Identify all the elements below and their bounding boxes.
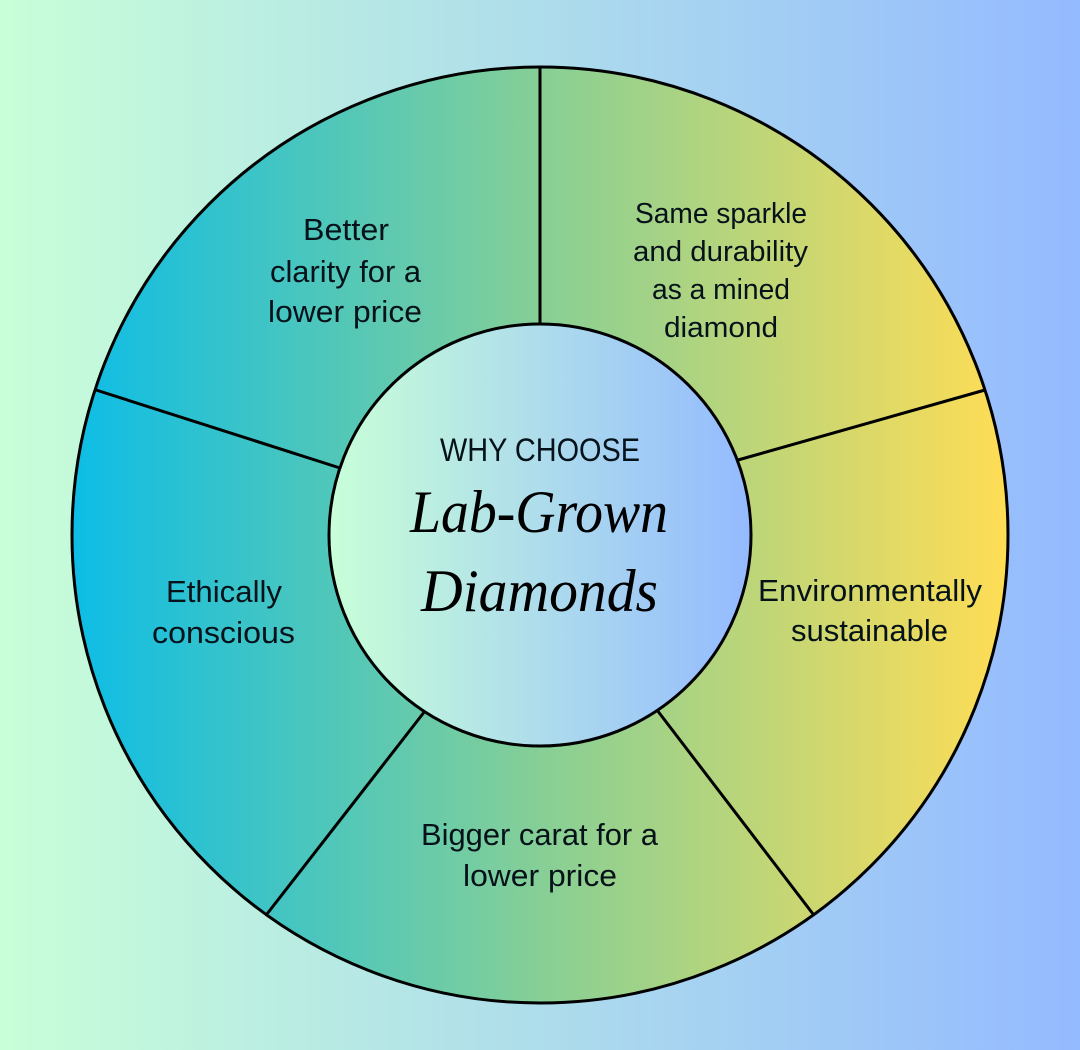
segment: better clarity: Better [303, 212, 389, 247]
segment: same sparkle [633, 198, 809, 344]
center hub [329, 324, 751, 746]
center title: WHY CHOOSE [440, 432, 640, 468]
segment: same sparkle: as a mined [652, 274, 790, 306]
center title: Lab-Grown [409, 479, 668, 545]
segment: bigger carat [421, 817, 659, 893]
segment: ethically conscious [152, 574, 295, 650]
center title: Diamonds [420, 558, 658, 624]
segment: same sparkle: and durability [633, 236, 809, 268]
segment: better clarity: clarity for a [270, 254, 422, 289]
wheel [72, 67, 1008, 1003]
segment: same sparkle: diamond [664, 312, 778, 344]
segment: ethically conscious: conscious [152, 615, 295, 650]
segment: bigger carat: lower price [463, 858, 617, 893]
segment: bigger carat: Bigger carat for a [421, 817, 659, 852]
center title [409, 432, 668, 624]
segment: same sparkle: Same sparkle [635, 198, 807, 230]
segment: better clarity [268, 212, 422, 329]
segment: ethically conscious: Ethically [166, 574, 282, 609]
segment: better clarity: lower price [268, 294, 422, 329]
segment: environmentally sustainable: sustainable [791, 613, 948, 648]
segment: environmentally sustainable [758, 573, 983, 648]
segment: environmentally sustainable: Environmentally [758, 573, 983, 608]
